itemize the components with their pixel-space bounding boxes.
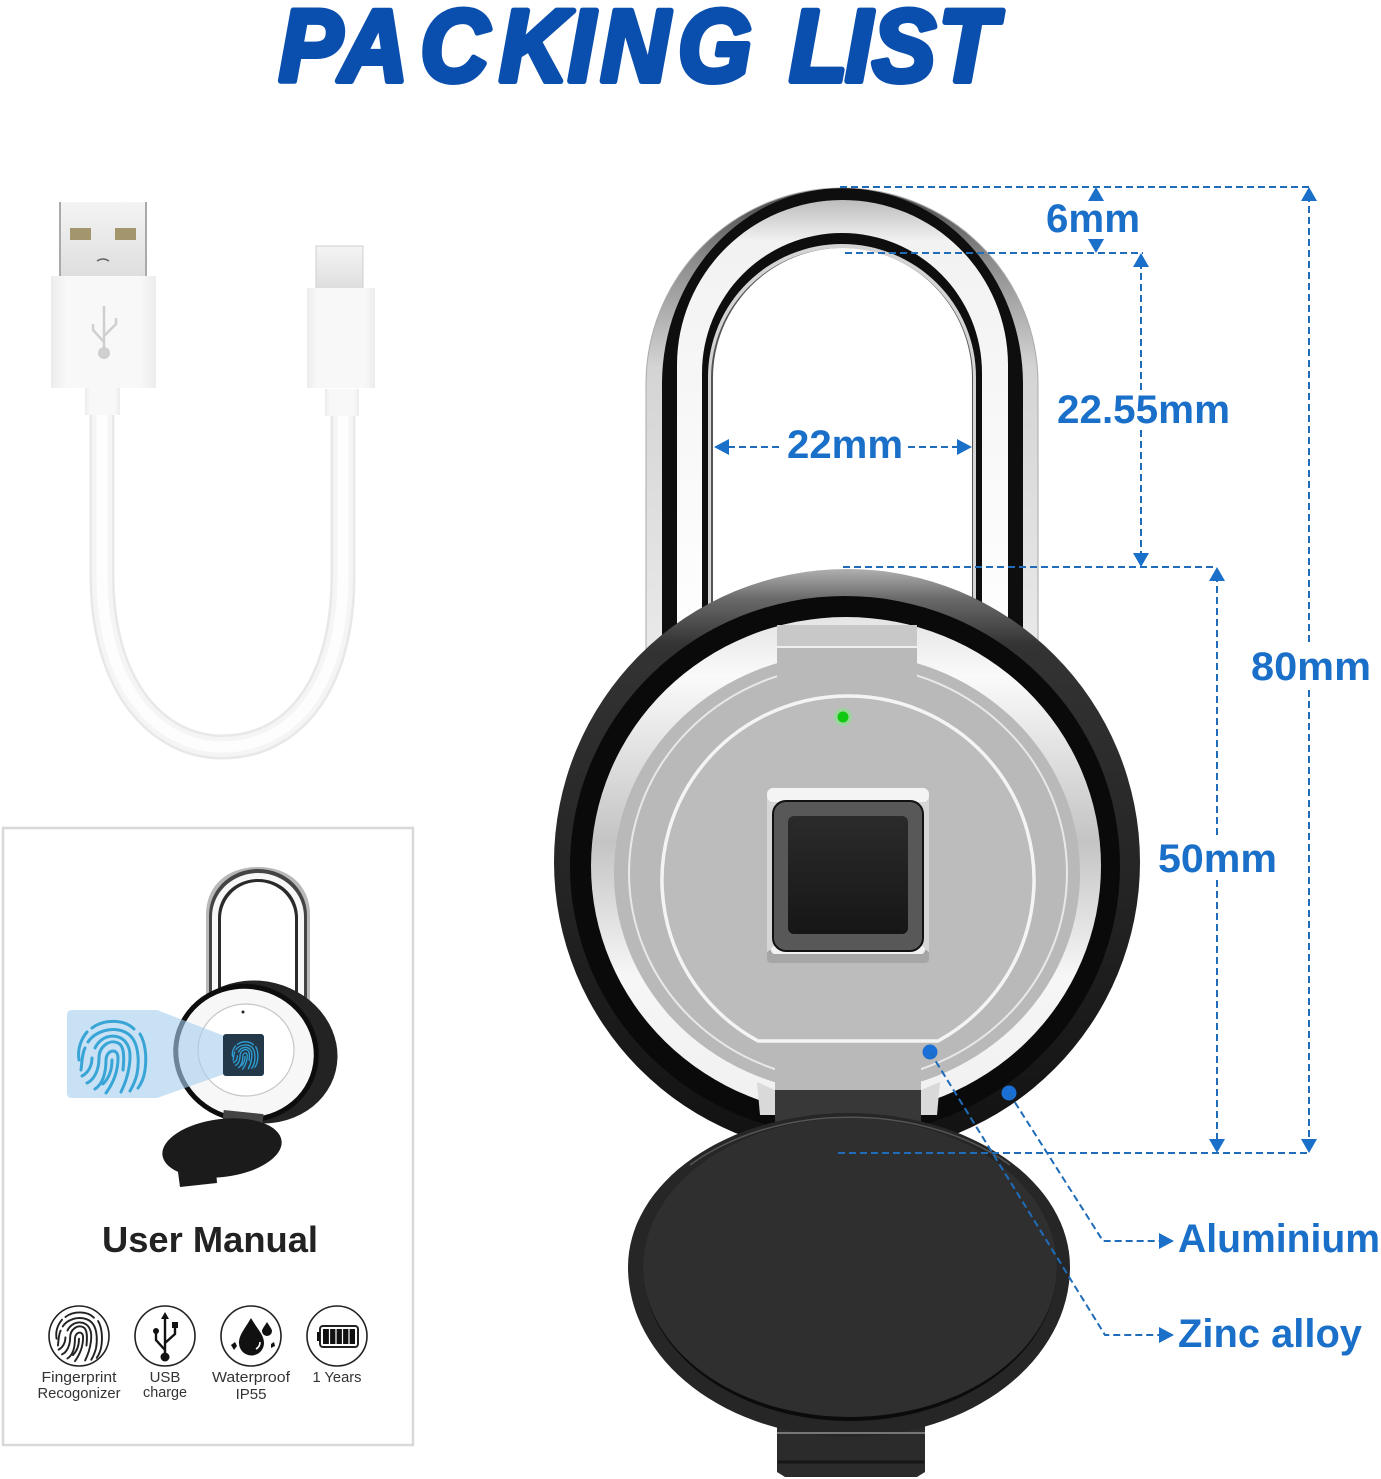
- dimension: 22mm with arrows: [714, 423, 972, 467]
- fingerprint beam: [67, 1010, 227, 1098]
- callout: aluminium: [1002, 1086, 1380, 1261]
- icon: waterproof: [212, 1306, 291, 1403]
- face plate: [614, 653, 1080, 1093]
- icon: fingerprint recognizer: Recogonizer: [38, 1385, 120, 1402]
- dimension: 80mm: 80mm: [1251, 645, 1371, 689]
- dimension: 6mm: 6mm: [1046, 197, 1140, 241]
- cable cord: [102, 410, 343, 747]
- USB-A plug: [51, 202, 156, 415]
- icon: fingerprint recognizer: [38, 1306, 120, 1402]
- icon: USB charge: charge: [143, 1384, 187, 1401]
- icon: fingerprint recognizer: Fingerprint: [42, 1369, 117, 1386]
- fingerprint sensor: [767, 788, 929, 963]
- icon: battery 1 year: [307, 1306, 367, 1386]
- LED indicator: [834, 708, 852, 726]
- lock body: [554, 569, 1140, 1155]
- dimension guide lines: [838, 187, 1317, 1153]
- dimension: 22.55mm: 22.55mm: [1057, 388, 1230, 432]
- hinge corners: [757, 1082, 775, 1115]
- icon: waterproof: IP55: [236, 1386, 266, 1403]
- user manual page: [3, 828, 413, 1445]
- fingerprint large: [79, 1021, 146, 1093]
- padlock: [554, 188, 1140, 1477]
- shackle: [646, 188, 1038, 680]
- dimension: 22mm with arrows: 22mm: [787, 423, 903, 467]
- callout: zinc alloy: Zinc alloy: [1178, 1312, 1363, 1356]
- fingerprint small: [232, 1042, 258, 1069]
- black ring: [570, 596, 1120, 1136]
- top tab: [777, 625, 917, 677]
- icon: battery 1 year: 1 Years: [312, 1369, 362, 1386]
- bottom notch: [775, 1040, 921, 1092]
- inner disc outline: [662, 696, 1034, 1041]
- callout: zinc alloy: [922, 1044, 1363, 1356]
- USB-C plug: [307, 246, 375, 416]
- cover: [628, 1113, 1070, 1477]
- dimension: 50mm: 50mm: [1158, 837, 1277, 881]
- cover bottom tab: [777, 1425, 925, 1477]
- callout: aluminium: Aluminium: [1178, 1217, 1380, 1261]
- silver ring: [591, 617, 1101, 1115]
- manual heading: User Manual: [102, 1219, 318, 1260]
- mini padlock illustration: [67, 867, 353, 1187]
- plate edge line: [629, 665, 1067, 1081]
- USB-A to USB-C cable: [51, 202, 375, 747]
- icon: USB charge: USB: [150, 1369, 180, 1386]
- hinge: [775, 1090, 921, 1124]
- icon: USB charge: [135, 1306, 195, 1401]
- icon: waterproof: Waterproof: [212, 1369, 291, 1386]
